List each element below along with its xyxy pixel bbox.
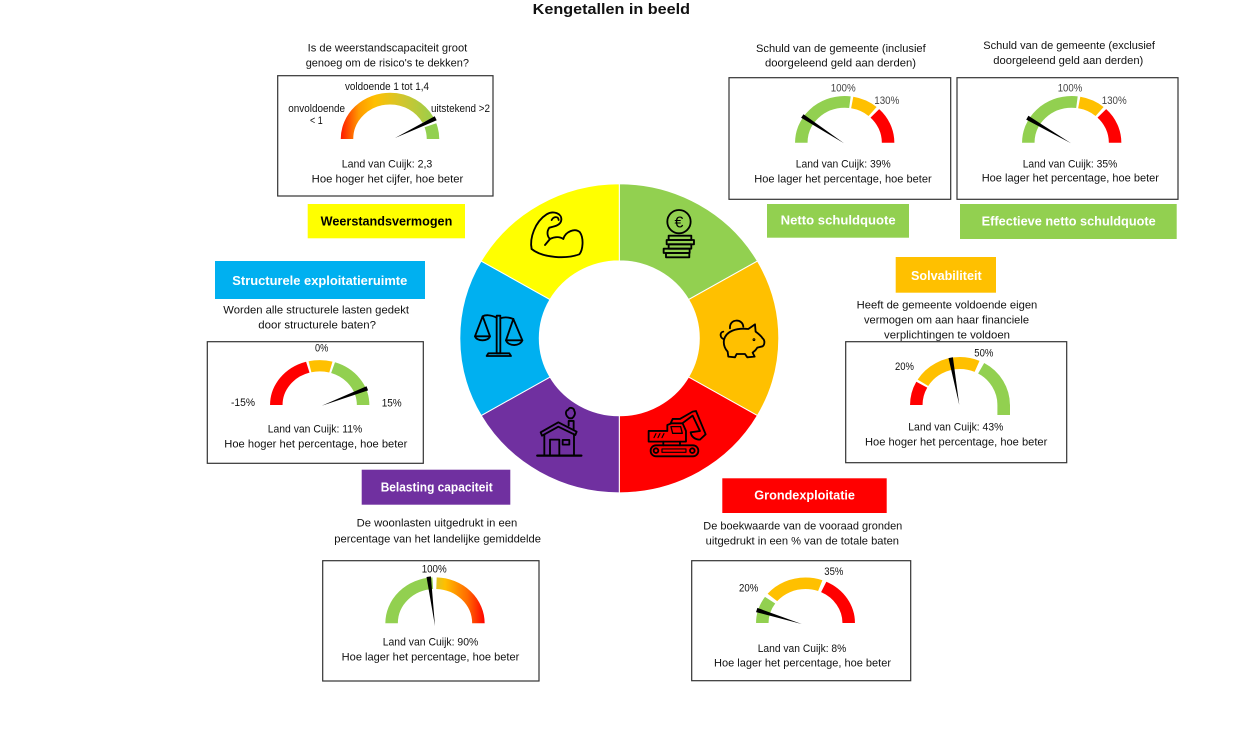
result text: Hoe hoger het percentage, hoe beter xyxy=(865,437,1048,449)
panel: solvabiliteit xyxy=(846,257,1067,463)
result text xyxy=(754,159,932,186)
result text: Hoe lager het percentage, hoe beter xyxy=(714,658,891,670)
scale labels: 20% xyxy=(895,361,914,373)
scale labels: 100% xyxy=(1058,83,1082,95)
scale labels: 35% xyxy=(824,566,843,578)
gauge card xyxy=(323,561,539,681)
gauge arc xyxy=(276,366,363,405)
donut chart xyxy=(460,184,779,493)
icon: piggy bank xyxy=(721,321,764,357)
result text: Hoe lager het percentage, hoe beter xyxy=(754,174,932,186)
scale labels xyxy=(739,566,843,595)
heading: structurele exploitatieruimte xyxy=(215,261,425,299)
heading: effectieve netto schuldquote xyxy=(960,204,1177,239)
scale labels: onvoldoende xyxy=(288,103,345,115)
needle xyxy=(801,114,844,143)
heading: effectieve netto schuldquote: Effectieve netto schuldquote xyxy=(982,215,1156,229)
panel: effectieve netto schuldquote xyxy=(957,40,1178,239)
result text: Hoe lager het percentage, hoe beter xyxy=(342,652,520,664)
scale labels xyxy=(831,83,899,107)
heading: belastingcapaciteit xyxy=(362,470,510,505)
needle xyxy=(395,116,437,138)
question: doorgeleend geld aan derden) xyxy=(765,58,916,70)
panel: weerstandsvermogen xyxy=(278,43,493,238)
result text: Hoe lager het percentage, hoe beter xyxy=(982,173,1159,185)
icon: euro coins xyxy=(664,210,694,257)
question: Schuld van de gemeente (inclusief xyxy=(756,43,927,55)
scale labels: < 1 xyxy=(310,115,323,127)
gauge arc xyxy=(916,363,1010,415)
question xyxy=(857,300,1037,341)
question: De boekwaarde van de vooraad gronden xyxy=(703,520,902,532)
needle xyxy=(322,386,368,406)
scale labels: 130% xyxy=(874,95,899,107)
question xyxy=(703,520,902,548)
result text xyxy=(224,424,408,451)
heading: solvabiliteit: Solvabiliteit xyxy=(911,269,983,283)
icon: house with chimney xyxy=(537,408,581,456)
result text: Land van Cuijk: 11% xyxy=(268,424,362,436)
question: uitgedrukt in een % van de totale baten xyxy=(706,536,899,548)
scale labels: 15% xyxy=(382,398,402,410)
gauge arc xyxy=(392,583,478,623)
panel: grondexploitatie xyxy=(692,478,911,681)
heading: netto schuldquote: Netto schuldquote xyxy=(781,214,896,228)
heading: grondexploitatie: Grondexploitatie xyxy=(754,488,855,502)
result text xyxy=(312,159,464,186)
heading: weerstandsvermogen: Weerstandsvermogen xyxy=(321,215,452,229)
result text xyxy=(714,643,891,670)
question xyxy=(983,40,1156,67)
scale labels xyxy=(1058,83,1127,107)
gauge card xyxy=(957,78,1178,199)
result text: Hoe hoger het cijfer, hoe beter xyxy=(312,174,464,186)
result text xyxy=(342,637,520,664)
question xyxy=(334,518,541,545)
question xyxy=(223,305,409,332)
question: Is de weerstandscapaciteit groot xyxy=(308,43,467,55)
needle xyxy=(1026,116,1071,143)
scale labels: 100% xyxy=(831,83,856,95)
result text xyxy=(865,422,1048,449)
scale labels xyxy=(288,81,490,127)
panel: belastingcapaciteit xyxy=(323,470,541,681)
scale labels xyxy=(231,343,402,410)
needle xyxy=(948,357,959,405)
icon: euro coins: € xyxy=(675,214,684,231)
question: percentage van het landelijke gemiddelde xyxy=(334,533,541,545)
scale labels: -15% xyxy=(231,397,255,409)
heading: grondexploitatie xyxy=(722,478,887,513)
scale labels: 50% xyxy=(974,348,993,360)
icon: excavator xyxy=(649,411,706,456)
result text: Land van Cuijk: 2,3 xyxy=(342,159,432,171)
scale labels: 0% xyxy=(315,343,328,355)
result text: Hoe hoger het percentage, hoe beter xyxy=(224,439,408,451)
result text: Land van Cuijk: 90% xyxy=(383,637,478,649)
question: verplichtingen te voldoen xyxy=(884,329,1010,341)
scale labels: uitstekend >2 xyxy=(431,103,490,115)
gauge card xyxy=(846,342,1067,463)
question: Schuld van de gemeente (exclusief xyxy=(983,40,1156,52)
result text: Land van Cuijk: 35% xyxy=(1023,159,1117,171)
gauge card xyxy=(692,561,911,681)
question xyxy=(756,43,927,70)
result text xyxy=(982,159,1159,185)
title: Kengetallen in beeld xyxy=(533,2,690,18)
gauge arc xyxy=(347,99,433,139)
gauge card xyxy=(207,342,423,463)
question: Heeft de gemeente voldoende eigen xyxy=(857,300,1037,312)
needle xyxy=(426,576,435,626)
result text: Land van Cuijk: 39% xyxy=(796,159,891,171)
result text: Land van Cuijk: 43% xyxy=(908,422,1003,434)
needle xyxy=(756,608,802,624)
heading: weerstandsvermogen xyxy=(308,204,465,238)
scale label: 100% xyxy=(422,564,447,576)
heading: belastingcapaciteit: Belasting capaciteit xyxy=(381,481,493,495)
question: door structurele baten? xyxy=(258,320,376,332)
question xyxy=(306,43,469,70)
scale labels: 130% xyxy=(1102,95,1127,107)
question: doorgeleend geld aan derden) xyxy=(993,55,1143,67)
scale labels xyxy=(895,348,993,373)
question: vermogen om aan haar financiele xyxy=(864,315,1029,327)
gauge arc xyxy=(1028,102,1115,143)
donut segments xyxy=(460,184,779,493)
gauge arc xyxy=(762,583,849,623)
gauge card xyxy=(729,78,951,199)
question: Worden alle structurele lasten gedekt xyxy=(223,305,409,317)
gauge card xyxy=(278,76,493,196)
gauge arc xyxy=(801,102,888,143)
scale labels: voldoende 1 tot 1,4 xyxy=(345,81,429,93)
scale labels: 20% xyxy=(739,583,758,595)
question: De woonlasten uitgedrukt in een xyxy=(357,518,517,530)
heading: solvabiliteit xyxy=(896,257,996,293)
question: genoeg om de risico's te dekken? xyxy=(306,58,469,70)
result text: Land van Cuijk: 8% xyxy=(758,643,847,655)
heading: netto schuldquote xyxy=(767,204,909,238)
icon: flexed arm xyxy=(531,213,583,257)
heading: structurele exploitatieruimte: Structurele exploitatieruimte xyxy=(232,274,407,288)
panel: structurele exploitatieruimte xyxy=(207,261,425,463)
panel: netto schuldquote xyxy=(729,43,951,238)
icon: balance scale xyxy=(475,315,522,356)
